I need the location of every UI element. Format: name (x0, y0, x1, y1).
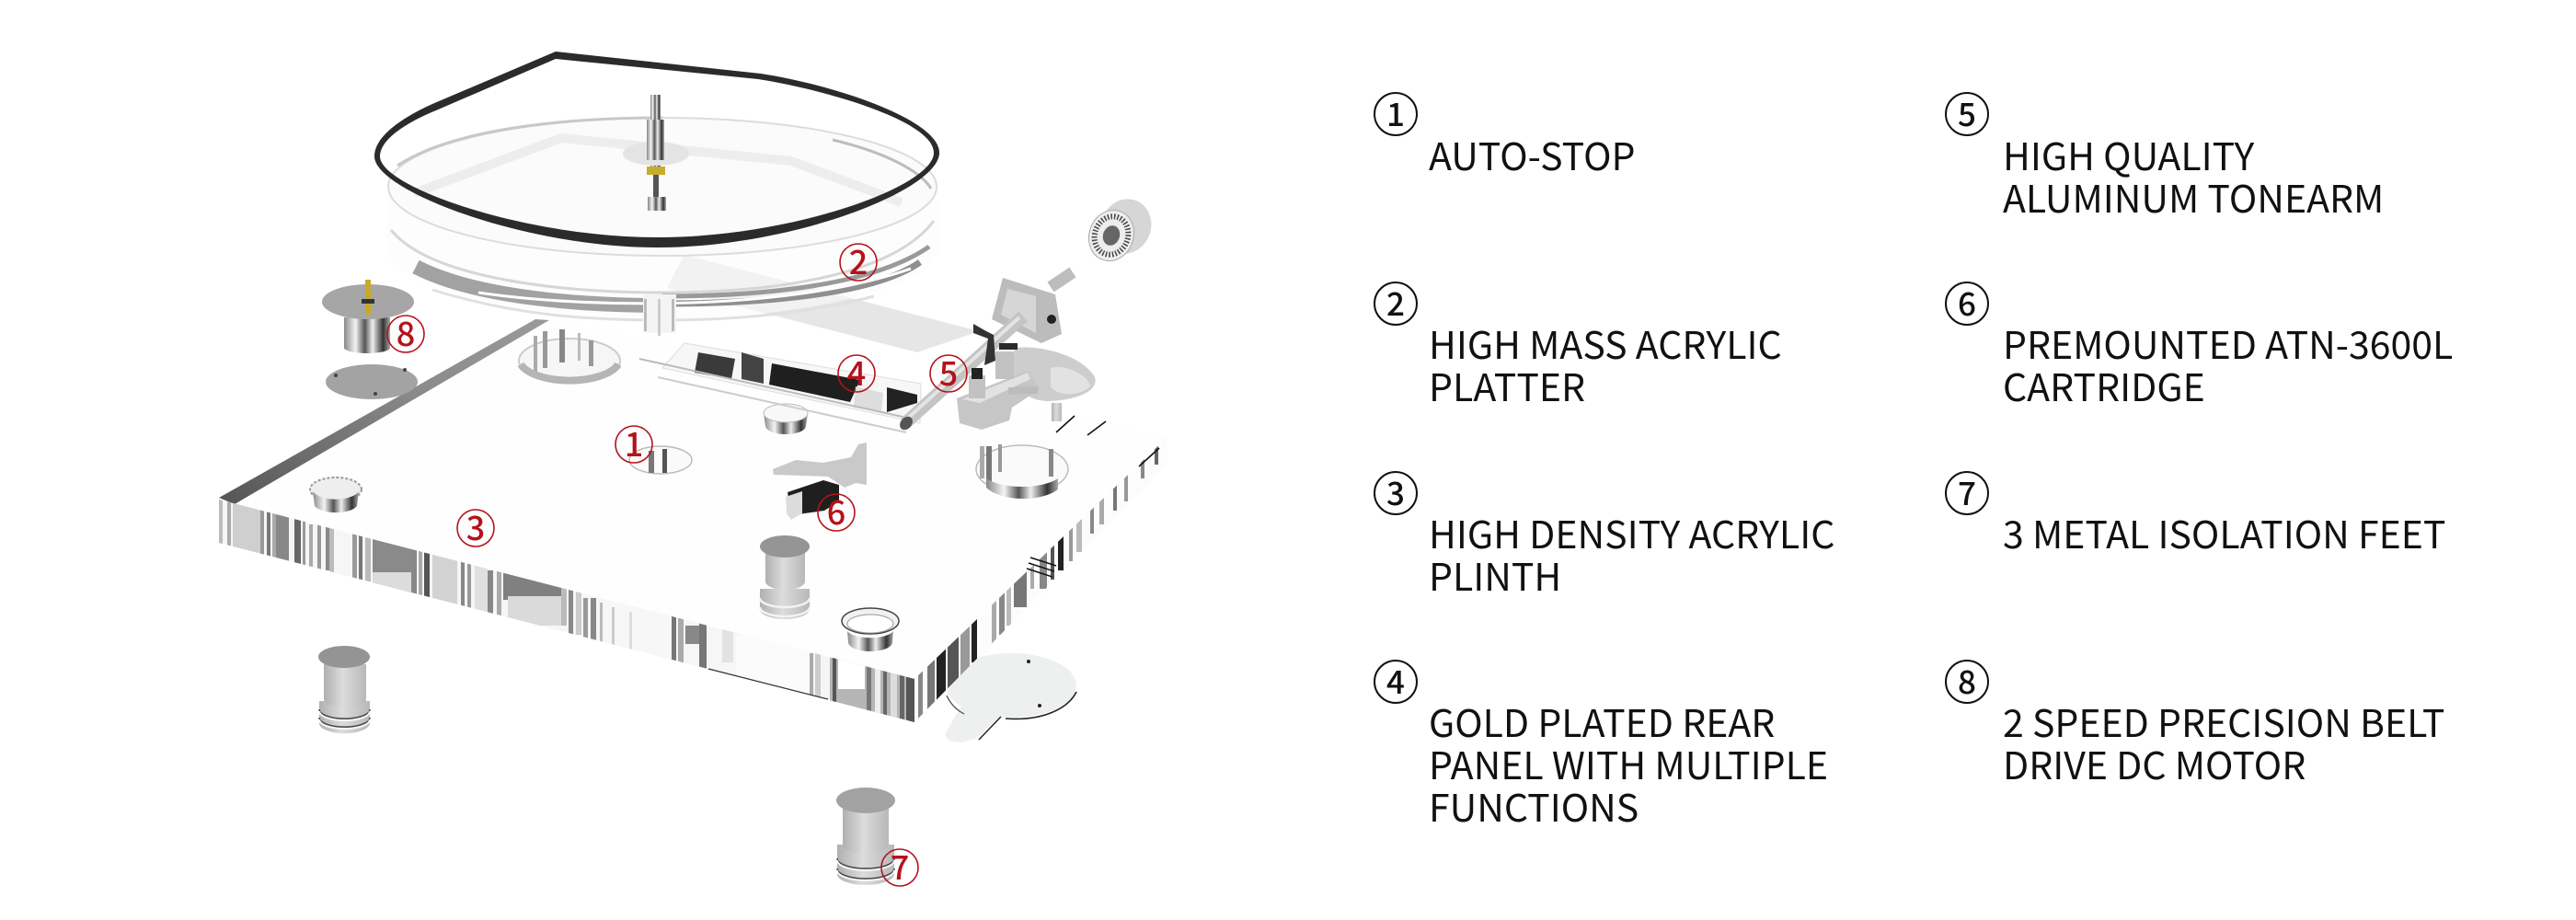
legend item 2: PLATTER (1429, 357, 1585, 412)
callout 4: 4 (847, 348, 866, 396)
legend item 7 (1946, 468, 2445, 559)
callout 4 (838, 348, 875, 396)
platter: clear acrylic disc (386, 118, 938, 320)
legend item 4: GOLD PLATED REAR (1429, 693, 1775, 748)
legend item 2 (1374, 279, 1782, 412)
callout 6: 6 (827, 487, 845, 535)
plinth right face (918, 445, 1158, 719)
tonearm counterweight stub (1051, 272, 1073, 287)
legend item 1 (1374, 89, 1635, 181)
callout 1 (615, 419, 652, 466)
plinth hole: left corner (310, 477, 362, 512)
callout 5 (930, 348, 967, 396)
legend (1374, 89, 2453, 833)
tonearm pin (1052, 403, 1062, 421)
motor pins (365, 280, 371, 315)
legend item 6 (1946, 279, 2453, 412)
plinth front lower line (708, 669, 828, 699)
cartridge headshell (773, 443, 867, 488)
legend item 6: CARTRIDGE (2003, 357, 2205, 412)
legend item 4: PANEL WITH MULTIPLE (1429, 735, 1828, 790)
legend item 6: 6 (1958, 279, 1976, 326)
tonearm gimbal (992, 278, 1062, 343)
callout 2 (840, 236, 877, 284)
plinth hole: front (842, 608, 899, 651)
callout 3: 3 (466, 502, 485, 550)
legend item 2: HIGH MASS ACRYLIC (1429, 315, 1782, 370)
callout 6 (818, 487, 855, 535)
callout 5: 5 (939, 348, 958, 396)
legend item 4 (1374, 657, 1828, 833)
rear panel black terminals (769, 363, 860, 402)
motor cover disc (326, 364, 418, 399)
legend item 7: 3 METAL ISOLATION FEET (2003, 504, 2445, 559)
plinth hole: big right (976, 444, 1068, 499)
legend item 7: 7 (1958, 468, 1976, 515)
legend item 8: 2 SPEED PRECISION BELT (2003, 693, 2444, 748)
plinth back edge (219, 319, 549, 504)
legend item 2: 2 (1386, 279, 1405, 326)
legend item 8: 8 (1958, 657, 1976, 704)
spindle gold collar (647, 167, 665, 175)
spindle (623, 95, 689, 211)
legend item 3: PLINTH (1429, 546, 1561, 602)
plinth: acrylic base slab (218, 319, 1172, 736)
legend item 3: 3 (1386, 468, 1405, 515)
callout 3 (457, 502, 494, 550)
legend item 4: FUNCTIONS (1429, 777, 1639, 833)
legend item 5: ALUMINUM TONEARM (2003, 168, 2384, 224)
legend item 5: HIGH QUALITY (2003, 126, 2255, 181)
tonearm base dome (1012, 347, 1096, 401)
legend item 3: HIGH DENSITY ACRYLIC (1429, 504, 1834, 559)
platter lower grey band (416, 267, 662, 305)
motor disc (322, 284, 414, 319)
legend item 6: PREMOUNTED ATN-3600L (2003, 315, 2453, 370)
drive belt (374, 52, 939, 247)
legend item 1: AUTO-STOP (1429, 126, 1635, 181)
motor cylinder (344, 317, 390, 353)
foot: back middle (760, 535, 810, 619)
tonearm lower block (957, 371, 1040, 430)
rest plate under platter (667, 255, 979, 352)
knob: anti-skate dial (1082, 192, 1159, 268)
tonearm tube (905, 316, 1023, 423)
motor (322, 280, 414, 353)
legend item 8: DRIVE DC MOTOR (2003, 735, 2306, 790)
legend item 1: 1 (1386, 89, 1405, 136)
plinth front face (219, 500, 914, 722)
rear cover plate (945, 653, 1076, 742)
callout 2: 2 (849, 236, 868, 284)
foot: left (318, 646, 370, 733)
plinth hole: mid (764, 404, 808, 434)
tonearm rest clip (973, 324, 995, 365)
rear panel switch (695, 352, 735, 379)
legend item 3 (1374, 468, 1834, 602)
platter shaft lower (643, 294, 676, 336)
callout markers (387, 236, 967, 890)
plinth hole: big left (519, 329, 620, 383)
tonearm (897, 272, 1096, 432)
foot: front (836, 788, 895, 885)
cartridge (773, 443, 867, 520)
plinth hole: center (629, 446, 692, 474)
legend item 4: 4 (1386, 657, 1405, 704)
callout 7: 7 (891, 842, 909, 890)
legend item 8 (1946, 657, 2444, 790)
rear panel small block (742, 352, 764, 384)
legend item 5 (1946, 89, 2384, 224)
plinth top surface (225, 320, 1167, 679)
callout 8 (387, 308, 424, 356)
tonearm post (995, 351, 1014, 379)
callout 7 (881, 842, 918, 890)
legend item 5: 5 (1958, 89, 1976, 136)
tonearm screw (1008, 390, 1038, 391)
cartridge body (788, 480, 839, 515)
callout 8: 8 (397, 308, 415, 356)
rear panel: gold plated connectors (639, 343, 921, 432)
callout 1: 1 (625, 419, 643, 466)
